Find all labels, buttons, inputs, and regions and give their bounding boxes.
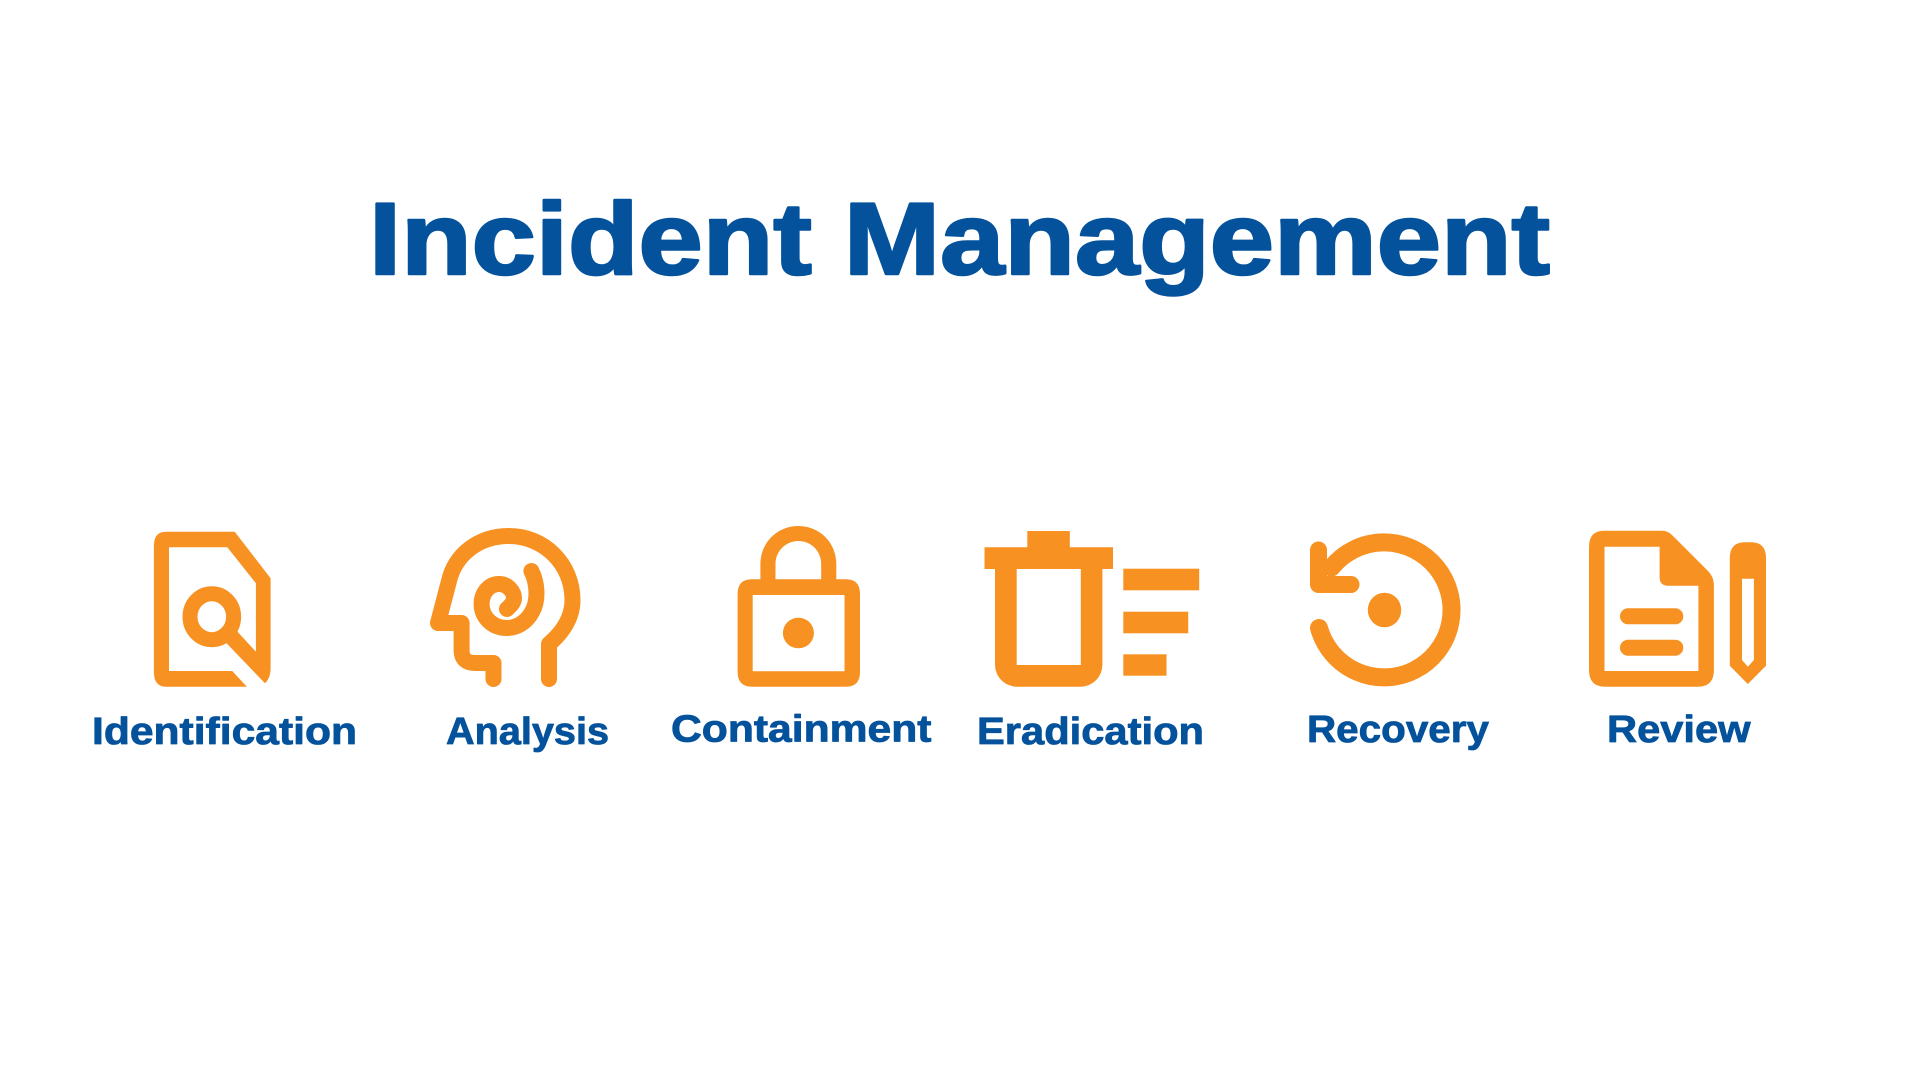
label: Eradication: Eradication	[977, 711, 1204, 753]
icon: padlock	[738, 526, 860, 687]
icon: head with spiral	[438, 536, 572, 679]
step: Recovery	[1307, 542, 1489, 751]
icon: counter-clockwise arrow around dot	[1318, 542, 1452, 677]
step: Containment	[671, 526, 932, 751]
step: Identification	[92, 532, 357, 753]
icon: document and pencil	[1589, 531, 1766, 687]
label: Identification: Identification	[92, 711, 357, 753]
label: Containment: Containment	[671, 709, 932, 751]
label: Review: Review	[1607, 709, 1751, 751]
step: Review	[1589, 531, 1766, 751]
title: Incident Management	[369, 182, 1550, 296]
label: Analysis: Analysis	[446, 711, 609, 753]
step: Eradication	[977, 531, 1204, 753]
label: Recovery: Recovery	[1307, 709, 1489, 751]
step: Analysis	[438, 536, 609, 753]
icon: document with magnifier	[154, 532, 271, 687]
icon: trash bin with lines	[984, 531, 1199, 687]
